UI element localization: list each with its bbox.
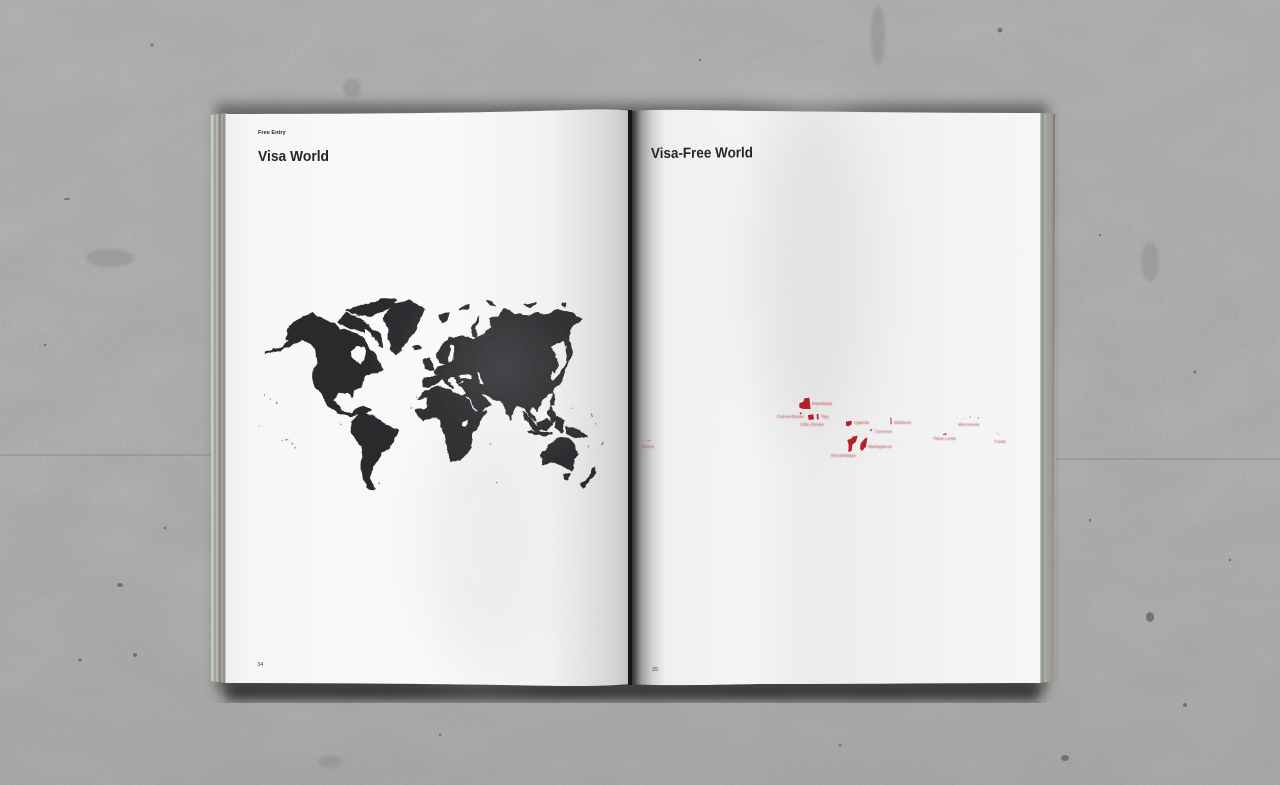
map white cut-outs <box>351 329 483 426</box>
small Pacific islands <box>259 395 603 484</box>
Timor-Leste <box>943 433 947 435</box>
Arctic Canada <box>337 299 396 347</box>
UK and northern islands <box>424 300 565 369</box>
Uganda <box>846 421 852 426</box>
Black and Caspian seas <box>459 372 483 385</box>
Iceland <box>413 344 421 350</box>
country labels: Côte d'Ivoire <box>800 422 825 427</box>
country labels: Guinea-Bissau <box>777 414 805 419</box>
left page stack edge <box>210 113 226 683</box>
Togo <box>817 414 819 419</box>
country labels: Tuvalu <box>994 439 1007 444</box>
Uganda gap <box>462 420 467 426</box>
panel: right page <box>629 100 1040 685</box>
country labels: Mozambique <box>831 453 857 458</box>
right page stack edge <box>1040 113 1055 683</box>
country labels: Maldives <box>894 420 912 425</box>
book spine <box>628 110 632 685</box>
Mozambique <box>847 436 858 452</box>
Tuvalu <box>997 432 999 435</box>
North America <box>265 314 383 416</box>
Micronesia <box>957 416 979 419</box>
Red Sea <box>466 397 477 411</box>
country labels: Madagascar <box>868 444 893 449</box>
country labels: Comoros <box>875 429 893 434</box>
Africa <box>416 387 486 462</box>
Japan and east Asia islands <box>548 337 573 422</box>
Comoros <box>870 429 872 431</box>
country labels: Timor-Leste <box>933 436 957 441</box>
page number 34: 34 <box>257 662 263 668</box>
Guinea-Bissau <box>800 412 802 414</box>
Mauritania gap <box>413 397 427 409</box>
Madagascar <box>860 437 867 451</box>
Eurasia <box>423 308 581 421</box>
country labels: Mauritania <box>812 401 833 406</box>
heading: Visa World: Visa World <box>258 149 329 165</box>
book shadow <box>216 104 1048 701</box>
country labels: Micronesia <box>958 422 980 427</box>
New Zealand <box>582 468 595 488</box>
Maldives <box>890 418 892 424</box>
red visa-free country map <box>799 398 999 452</box>
country labels: Samoa <box>642 444 654 449</box>
Samoa mark <box>647 440 651 441</box>
country labels: Uganda <box>854 420 870 425</box>
country labels: Togo <box>821 414 829 419</box>
Indonesia and New Guinea <box>523 412 587 437</box>
Hudson Bay <box>351 346 365 364</box>
Baltic <box>449 345 453 362</box>
Cote d'Ivoire <box>808 414 814 420</box>
Australia <box>542 437 577 470</box>
panel: left page <box>226 109 629 686</box>
page number 35: 35 <box>652 667 658 673</box>
Mauritania <box>799 398 811 409</box>
South America <box>352 413 397 489</box>
world map <box>259 299 603 489</box>
page kicker: Free Entry <box>258 130 287 136</box>
heading: Visa-Free World: Visa-Free World <box>651 145 753 162</box>
country labels <box>642 401 1007 458</box>
Greenland <box>383 301 424 354</box>
